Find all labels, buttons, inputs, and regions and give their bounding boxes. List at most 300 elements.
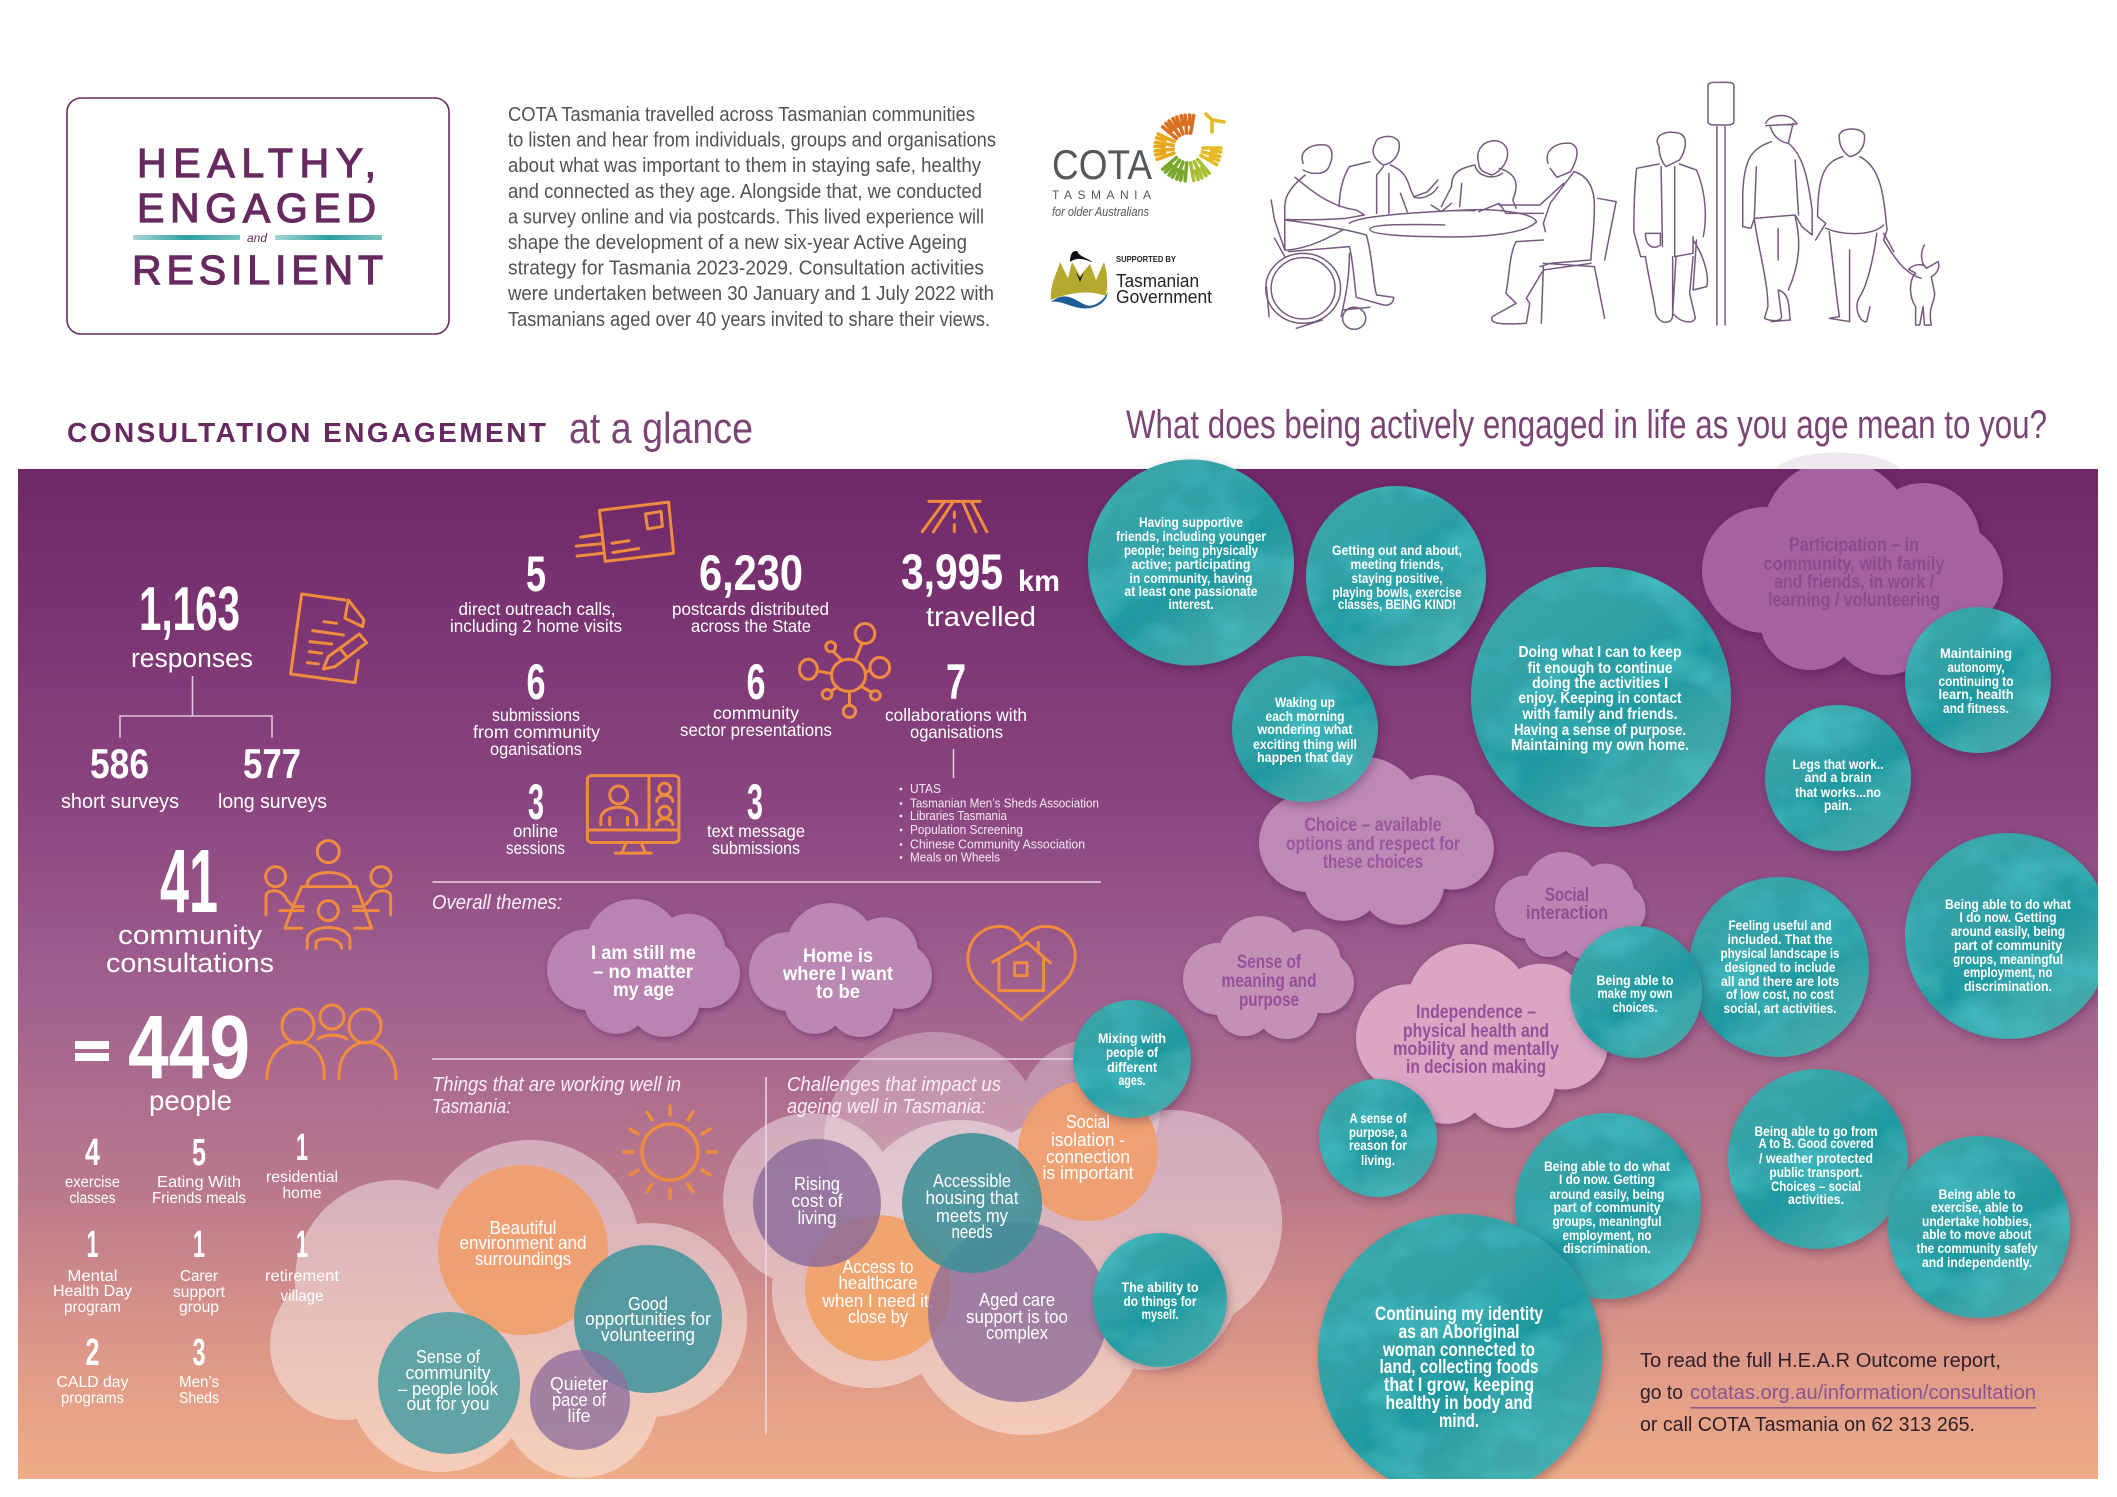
quote: feeling useful: of low cost, no cost (1726, 986, 1834, 1002)
COTA Tasmania logo: TASMANIA (1052, 188, 1151, 202)
quote: having supportive friends: Having supportive (1139, 514, 1243, 530)
stat: 41 community consultations: community (118, 920, 263, 950)
stat: 6 submissions (473, 654, 600, 759)
quote: doing what I can: doing the activities I (1532, 675, 1668, 692)
call to action text: or call COTA Tasmania on 62 313 265. (1640, 1413, 1975, 1436)
quote: getting out and about: meeting friends, (1350, 556, 1444, 572)
cloud: social interaction: interaction (1526, 903, 1608, 924)
stat: 5 direct outreach calls: 5 (526, 546, 546, 602)
quote: doing what I can: Having a sense of purpose. (1514, 722, 1686, 739)
collaborators list: Meals on Wheels (910, 849, 1000, 864)
breakdown: 5 eating with friends (152, 1132, 246, 1207)
cloud: independence: in decision making (1406, 1057, 1546, 1078)
quote: mixing with people: Mixing with (1098, 1030, 1166, 1046)
circle: rising cost of living: living (798, 1207, 836, 1228)
circle: beautiful environment (438, 1165, 608, 1335)
stat: 586 short surveys: 586 (90, 740, 149, 787)
quote: being able to do what I do now (lower) (1515, 1113, 1701, 1299)
quote: the ability to do things: do things for (1124, 1293, 1197, 1309)
quote: getting out and about (1306, 486, 1486, 666)
stat: 3 text message submissions: 3 (747, 774, 763, 830)
stat: 6,230 postcards: 6,230 (699, 545, 803, 601)
quote: being able to do what I do now (right): around easily, being (1951, 923, 2065, 939)
quote: mixing with people: ages. (1118, 1072, 1146, 1088)
teal quote circles (1073, 460, 2111, 1497)
breakdown: 3 men's sheds (179, 1332, 219, 1407)
quote: getting out and about: staying positive, (1352, 570, 1442, 586)
quote: a sense of purpose: purpose, a (1349, 1124, 1407, 1140)
stat: 3,995 km travelled: km (1018, 565, 1060, 598)
cloud: participation: and friends, in work / (1774, 572, 1935, 593)
heading: challenges: Challenges that impact us (787, 1074, 1001, 1096)
intro paragraph: a survey online and via postcards. This lived experience will (508, 205, 984, 228)
quote: A to B transport: / weather protected (1759, 1150, 1873, 1166)
cloud: choice: these choices (1323, 852, 1423, 873)
breakdown: 4 exercise classes: 4 (85, 1132, 100, 1174)
call to action text: cotatas.org.au/information/consultation (1690, 1381, 2036, 1404)
quote: being able to do what I do now (right): part of community (1954, 937, 2062, 953)
breakdown: 1 retirement village: village (280, 1288, 324, 1305)
heading: challenges: ageing well in Tasmania: (787, 1096, 986, 1118)
stat: 5 direct outreach calls: direct outreach calls, (458, 599, 616, 619)
heading: overall themes: Overall themes: (432, 892, 562, 914)
collaborators list: Tasmanian Men’s Sheds Association (910, 796, 1099, 810)
cloud: participation: Participation – in (1789, 535, 1919, 556)
quote: maintaining autonomy: learn, health (1938, 686, 2014, 702)
theme cloud: home is where I want to be (749, 903, 932, 1037)
quote: having supportive friends: friends, including younger (1116, 528, 1266, 544)
quote: having supportive friends (1088, 460, 1294, 666)
divider lines (432, 882, 1101, 1434)
breakdown: 1 carer support group: Carer (180, 1268, 218, 1285)
stat: 3 online sessions: 3 (528, 774, 544, 830)
cloud: independence (1356, 944, 1608, 1128)
line art illustration: people at table and at bus stop (1266, 82, 1939, 329)
cloud: choice: Choice – available (1304, 815, 1442, 836)
quote: doing what I can: with family and friends. (1522, 706, 1678, 723)
collaborators list: Chinese Community Association (910, 837, 1085, 852)
quote: A to B transport: A to B. Good covered (1758, 1135, 1874, 1151)
quote: feeling useful: social, art activities. (1724, 1000, 1836, 1016)
breakdown: 1 mental health day: program (64, 1299, 121, 1316)
quote: feeling useful: physical landscape is (1720, 945, 1840, 961)
title box: RESILIENT (132, 247, 383, 293)
circle: accessible housing: Accessible (933, 1170, 1011, 1191)
circle: good opportunities (574, 1245, 722, 1393)
cloud: sense of meaning: meaning and (1222, 971, 1316, 992)
quote: waking up: happen that day (1257, 749, 1353, 765)
stat: 3,995 km travelled: 3,995 (901, 544, 1003, 600)
quote: getting out and about: Getting out and about, (1332, 542, 1462, 558)
call to action text: To read the full H.E.A.R Outcome report, (1640, 1349, 2001, 1372)
heading: things working well: Things that are working well in (432, 1074, 681, 1096)
COTA Tasmania logo: COTA (1052, 141, 1152, 188)
breakdown: 1 retirement village (265, 1224, 340, 1305)
circle: sense of community: community (406, 1363, 490, 1383)
quote: exercise and hobbies (1888, 1136, 2070, 1318)
collaborators list: UTAS (910, 781, 941, 796)
breakdown: 1 mental health day: Health Day (53, 1283, 132, 1300)
quote: legs that work: and a brain (1804, 769, 1872, 785)
stat: 1,163 responses (131, 575, 253, 673)
quote: being able to do what I do now (lower): discrimination. (1563, 1240, 1651, 1256)
quote: a sense of purpose (1319, 1079, 1437, 1197)
quote: having supportive friends: people; being physically (1124, 542, 1258, 558)
quote: being able to do what I do now (right): I do now. Getting (1960, 909, 2056, 925)
quote: A to B transport (1728, 1069, 1908, 1249)
theme cloud: I am still me: my age (613, 980, 674, 1001)
circle: quieter pace of life (530, 1350, 630, 1450)
collaborators list (900, 781, 1099, 864)
breakdown: 1 residential home: residential (266, 1169, 338, 1186)
quote: continuing my identity: Continuing my identity (1375, 1304, 1543, 1325)
quote: exercise and hobbies: and independently. (1922, 1254, 2032, 1270)
stat: 7 collaborations (885, 654, 1027, 742)
collaborators list: Population Screening (910, 822, 1023, 837)
quote: a sense of purpose: living. (1361, 1152, 1395, 1168)
cloud: things working well (270, 1140, 747, 1478)
quote: exercise and hobbies: Being able to (1938, 1186, 2016, 1202)
quote: doing what I can: fit enough to continue (1528, 660, 1673, 677)
quote: mixing with people (1073, 1000, 1191, 1118)
icon: postcard (576, 502, 674, 561)
circle: access to healthcare (805, 1215, 951, 1361)
stat: 6 submissions: submissions (492, 705, 580, 725)
quote: A to B transport: Choices – social (1771, 1178, 1861, 1194)
theme cloud: home is where I want to be: Home is (803, 946, 873, 967)
icon: heart with house (968, 926, 1075, 1020)
cloud: choice (1259, 757, 1494, 925)
icon: COTA sunburst (1155, 114, 1224, 181)
quote: legs that work: Legs that work.. (1792, 756, 1884, 772)
circle: beautiful environment: surroundings (475, 1249, 571, 1269)
title box: HEALTHY, (137, 140, 376, 186)
stat: equals 449 people (75, 998, 250, 1116)
circle: accessible housing: needs (952, 1221, 992, 1242)
circle: social isolation (1018, 1081, 1158, 1221)
cloud: independence: mobility and mentally (1393, 1039, 1559, 1060)
stat: 3 online sessions (506, 774, 565, 858)
Tasmanian Government logo (1051, 251, 1212, 308)
intro paragraph: Tasmanians aged over 40 years invited to share their views. (508, 308, 990, 331)
quote: waking up: Waking up (1275, 694, 1335, 710)
theme cloud: home is where I want to be: where I want (782, 964, 894, 985)
circle: access to healthcare: healthcare (838, 1272, 918, 1293)
stat: 3,995 km travelled: travelled (926, 601, 1036, 632)
quote: having supportive friends: active; participating (1132, 556, 1250, 572)
circle: social isolation: isolation - (1051, 1129, 1125, 1150)
circle: rising cost of living: cost of (792, 1190, 843, 1211)
circle: sense of community: out for you (406, 1394, 490, 1414)
breakdown: 1 mental health day: Mental (68, 1268, 118, 1285)
quote: being able to do what I do now (right): discrimination. (1964, 978, 2052, 994)
quote: having supportive friends: in community, having (1130, 570, 1252, 586)
breakdown: 1 residential home: 1 (296, 1127, 308, 1169)
Tasmanian Government logo: Government (1116, 287, 1212, 307)
intro paragraph (507, 103, 996, 331)
circle: aged care: complex (986, 1322, 1049, 1343)
quote: having supportive friends: at least one passionate (1124, 583, 1258, 599)
stat: 5 direct outreach calls: including 2 home visits (450, 616, 622, 636)
stat: 7 collaborations: oganisations (910, 722, 1003, 742)
quote: being able to do what I do now (right): employment, no (1964, 964, 2052, 980)
quote: maintaining autonomy: and fitness. (1943, 700, 2009, 716)
intro paragraph: COTA Tasmania travelled across Tasmanian communities (508, 103, 975, 126)
breakdown: 1 retirement village: 1 (296, 1224, 308, 1266)
stat: 6 submissions: oganisations (490, 739, 582, 759)
quote: make my own choices: make my own (1598, 985, 1672, 1001)
stat: 1,163 responses: responses (131, 643, 253, 673)
breakdown: 2 CALD day programs (56, 1332, 129, 1407)
stat: 6 sector presentations: sector presentations (680, 720, 832, 740)
circle: good opportunities: Good (628, 1294, 668, 1314)
heading: consultation engagement at a glance (67, 404, 753, 453)
breakdown: 2 CALD day programs: CALD day (56, 1374, 129, 1391)
circle: quieter pace of life: pace of (552, 1390, 607, 1410)
stat: 6 submissions: 6 (526, 654, 546, 710)
breakdown: 4 exercise classes: exercise (65, 1174, 120, 1191)
circle: social isolation: is important (1042, 1162, 1134, 1183)
circle: rising cost of living: Rising (794, 1173, 840, 1194)
breakdown: 4 exercise classes (65, 1132, 120, 1207)
circle: accessible housing (902, 1133, 1042, 1273)
quote: exercise and hobbies: the community safely (1916, 1240, 2038, 1256)
stat: equals 449 people: people (149, 1085, 232, 1116)
cloud: choice: options and respect for (1286, 834, 1460, 855)
stat: 577 long surveys: long surveys (218, 791, 327, 813)
circle: quieter pace of life: Quieter (550, 1374, 608, 1394)
breakdown: 1 carer support group (173, 1224, 226, 1316)
breakdown: 1 retirement village: retirement (265, 1268, 340, 1285)
icon: three people (267, 1005, 396, 1079)
theme cloud: home is where I want to be: to be (816, 982, 860, 1003)
stat: 6 sector presentations: community (713, 703, 799, 723)
circle: access to healthcare: close by (848, 1306, 909, 1327)
breakdown: 5 eating with friends: Eating With (157, 1174, 241, 1191)
quote: exercise and hobbies: exercise, able to (1931, 1199, 2023, 1215)
quote: A to B transport: activities. (1788, 1191, 1844, 1207)
cloud: challenges (723, 1032, 1282, 1435)
cloud: social interaction: Social (1545, 885, 1589, 906)
cloud: sense of meaning: purpose (1239, 990, 1299, 1011)
quote: doing what I can: enjoy. Keeping in contact (1518, 690, 1682, 707)
quote: mixing with people: people of (1106, 1044, 1158, 1060)
stat: 1,163 responses: 1,163 (139, 575, 240, 644)
quote: maintaining autonomy: Maintaining (1940, 645, 2012, 661)
stat: 6 sector presentations: 6 (746, 654, 766, 710)
breakdown: 2 CALD day programs: 2 (86, 1332, 100, 1374)
circle: quieter pace of life: life (568, 1406, 590, 1426)
quote: having supportive friends: interest. (1168, 596, 1214, 612)
quote: being able to do what I do now (lower): I do now. Getting (1559, 1171, 1655, 1187)
stat: 41 community consultations: consultations (106, 948, 274, 978)
quote: exercise and hobbies: undertake hobbies, (1922, 1213, 2032, 1229)
quote: getting out and about: classes, BEING KIND! (1338, 596, 1456, 612)
stat: 6 sector presentations (680, 654, 832, 740)
quote: waking up: wondering what (1257, 721, 1353, 737)
stat: 41 community consultations: 41 (160, 832, 218, 932)
breakdown: 3 men's sheds: Men’s (179, 1374, 219, 1391)
quote: maintaining autonomy (1905, 607, 2051, 753)
quote: legs that work: pain. (1824, 797, 1852, 813)
quote: legs that work (1765, 705, 1911, 851)
circle: rising cost of living (753, 1139, 881, 1267)
circle: accessible housing: meets my (936, 1205, 1009, 1226)
circle: aged care: support is too (966, 1306, 1068, 1327)
cloud: sense of meaning (1183, 916, 1354, 1039)
cloud: independence: Independence – (1416, 1002, 1536, 1023)
quote: A to B transport: public transport. (1770, 1164, 1862, 1180)
quote: continuing my identity: land, collecting foods (1380, 1357, 1538, 1378)
icon: road (922, 501, 987, 532)
breakdown: 2 CALD day programs: programs (61, 1390, 124, 1407)
icon: video call monitor (587, 776, 679, 853)
quote: exercise and hobbies: able to move about (1922, 1226, 2032, 1242)
stat: 7 collaborations: 7 (946, 654, 966, 710)
tree connector lines (120, 676, 272, 738)
icon: sun (624, 1106, 716, 1198)
stat: 577 long surveys (218, 740, 327, 813)
COTA Tasmania logo (1052, 114, 1224, 219)
heading: challenges (787, 1074, 1001, 1118)
quote: being able to do what I do now (right): groups, meaningful (1953, 951, 2063, 967)
stat: 6,230 postcards (672, 545, 829, 636)
call to action text: go to (1640, 1381, 1683, 1404)
quote: doing what I can: Maintaining my own home. (1511, 737, 1689, 754)
circle: social isolation: connection (1046, 1146, 1130, 1167)
circle: aged care (928, 1222, 1108, 1402)
quote: feeling useful: all and there are lots (1721, 973, 1839, 989)
stat: 5 direct outreach calls (450, 546, 622, 636)
stat: 3 online sessions: sessions (506, 838, 565, 858)
quote: make my own choices: Being able to (1596, 972, 1674, 988)
stat: equals 449 people: 449 (128, 998, 250, 1098)
cloud: participation: community, with family (1764, 554, 1945, 575)
quote: being able to do what I do now (right): Being able to do what (1945, 896, 2071, 912)
breakdown: 1 carer support group: group (179, 1299, 219, 1316)
quote: the ability to do things: myself. (1142, 1306, 1178, 1322)
quote: being able to do what I do now (lower): around easily, being (1550, 1186, 1664, 1202)
quote: the ability to do things (1093, 1233, 1227, 1367)
circle: access to healthcare: when I need it, (822, 1290, 934, 1311)
cloud: participation (1702, 452, 2003, 675)
breakdown: 1 carer support group: support (173, 1284, 226, 1301)
theme cloud: I am still me (547, 899, 740, 1037)
heading: things working well: Tasmania: (432, 1096, 511, 1118)
quote: a sense of purpose: reason for (1349, 1137, 1407, 1153)
intro paragraph: shape the development of a new six-year Active Ageing (508, 231, 967, 254)
circle: sense of community (378, 1312, 520, 1454)
quote: make my own choices (1570, 926, 1702, 1058)
quote: mixing with people: different (1107, 1059, 1157, 1075)
quote: being able to do what I do now (lower): employment, no (1562, 1227, 1652, 1243)
stat: 6 submissions: from community (473, 722, 600, 742)
quote: feeling useful: Feeling useful and (1728, 917, 1832, 933)
intro paragraph: strategy for Tasmania 2023-2029. Consultation activities (508, 257, 984, 280)
quote: being able to do what I do now (lower): groups, meaningful (1552, 1213, 1662, 1229)
circle: sense of community: – people look (398, 1379, 499, 1399)
heading: things working well (432, 1074, 681, 1118)
quote: feeling useful: included. That the (1728, 931, 1833, 947)
call to action text (1640, 1349, 2036, 1436)
breakdown: 5 eating with friends: Friends meals (152, 1190, 246, 1207)
breakdown: 1 mental health day (53, 1224, 132, 1316)
circle: good opportunities: volunteering (601, 1325, 695, 1345)
Tasmanian Government logo: SUPPORTED BY (1116, 255, 1177, 264)
intro paragraph: to listen and hear from individuals, groups and organisations (508, 129, 996, 152)
quote: a sense of purpose: A sense of (1350, 1110, 1407, 1126)
cloud: social interaction (1495, 852, 1646, 960)
quote: A to B transport: Being able to go from (1754, 1123, 1878, 1139)
quote: maintaining autonomy: autonomy, (1948, 659, 2004, 675)
circle: beautiful environment: Beautiful (490, 1218, 556, 1238)
quote: waking up: exciting thing will (1253, 736, 1357, 752)
quote: the ability to do things: The ability to (1122, 1279, 1198, 1295)
stat: 3 text message submissions: text message (707, 821, 805, 841)
circle: aged care: Aged care (979, 1289, 1055, 1310)
stat: 6,230 postcards: across the State (691, 616, 811, 636)
quote: continuing my identity: woman connected to (1382, 1340, 1535, 1361)
circle: access to healthcare: Access to (842, 1256, 914, 1277)
breakdown: 1 mental health day: 1 (86, 1224, 98, 1266)
quote: make my own choices: choices. (1612, 999, 1658, 1015)
stat: 577 long surveys: 577 (243, 740, 301, 787)
intro paragraph: about what was important to them in staying safe, healthy (508, 154, 982, 177)
icon: survey document and pen (291, 594, 367, 683)
cloud: independence: physical health and (1403, 1021, 1549, 1042)
theme cloud: I am still me: – no matter (593, 962, 694, 983)
collaborators list: Libraries Tasmania (910, 808, 1008, 823)
breakdown: 3 men's sheds: Sheds (179, 1390, 219, 1407)
breakdown: 3 men's sheds: 3 (192, 1332, 206, 1374)
quote: continuing my identity: mind. (1439, 1411, 1479, 1432)
quote: doing what I can (1471, 567, 1731, 827)
COTA Tasmania logo: for older Australians (1052, 204, 1149, 219)
title box: and (247, 231, 267, 245)
circle: social isolation: Social (1066, 1111, 1110, 1132)
quote: being able to do what I do now (lower): part of community (1554, 1199, 1661, 1215)
cloud: participation: learning / volunteering (1768, 590, 1940, 611)
quote: waking up (1232, 656, 1378, 802)
stat: 3 text message submissions (707, 774, 805, 858)
stat: 6,230 postcards: postcards distributed (672, 599, 829, 619)
title box (67, 98, 449, 334)
circle: sense of community: Sense of (416, 1347, 481, 1367)
overlap circles: challenges (753, 1081, 1158, 1402)
quote: waking up: each morning (1266, 708, 1344, 724)
overlap circles: things working well (378, 1165, 722, 1454)
quote: feeling useful: designed to include (1724, 959, 1836, 975)
heading: consultation engagement at a glance: CONSULTATION ENGAGEMENT (67, 417, 546, 448)
cloud: sense of meaning: Sense of (1237, 952, 1302, 973)
quote: maintaining autonomy: continuing to (1938, 673, 2014, 689)
quote: continuing my identity: that I grow, keeping (1384, 1375, 1534, 1396)
stat: 3 online sessions: online (513, 821, 558, 841)
circle: good opportunities: opportunities for (585, 1309, 711, 1329)
circle: accessible housing: housing that (926, 1187, 1018, 1208)
title box: ENGAGED (137, 185, 376, 231)
collaborators connector (952, 749, 954, 778)
stat: 3,995 km travelled (901, 544, 1060, 632)
icon: network (799, 624, 890, 717)
stat: 586 short surveys (61, 740, 179, 813)
breakdown: 1 residential home: home (282, 1185, 322, 1202)
icon: meeting table (266, 841, 391, 948)
breakdown: 1 carer support group: 1 (193, 1224, 205, 1266)
quote: doing what I can: Doing what I can to keep (1518, 644, 1682, 661)
quote: being able to do what I do now (right) (1905, 833, 2111, 1039)
quote: continuing my identity: healthy in body and (1386, 1393, 1532, 1414)
